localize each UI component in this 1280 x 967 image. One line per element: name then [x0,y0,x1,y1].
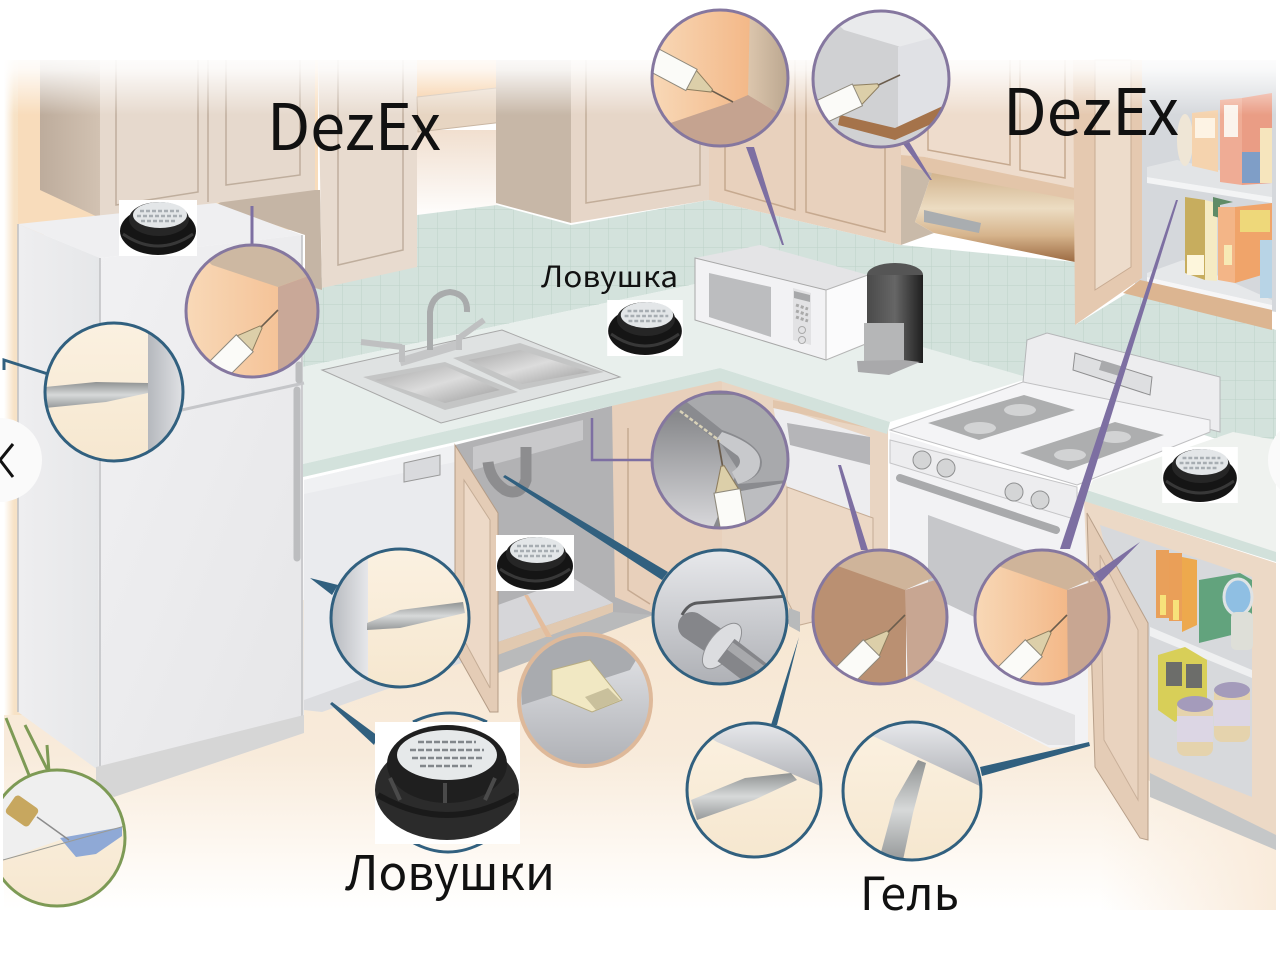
zoom circle: pipe seal [650,549,790,690]
countertop [303,283,1030,477]
large trap [375,713,520,852]
range hood [901,165,1075,262]
trap on counter [607,300,683,356]
zoom circle: sink underside [650,390,790,530]
back wall [4,60,497,715]
top fade [0,50,1280,115]
zoom circle: upper cabinet inside corner [650,8,790,148]
microwave [695,245,868,360]
zoom circle: green applicator [3,768,126,908]
upper cabinets [40,60,1075,290]
open sink cabinet door [455,445,498,712]
sink and faucet [322,292,620,423]
open cabinet with shelves and books [1073,60,1276,330]
zoom circle: peach cabinet corner [974,548,1110,686]
zoom circle: fridge gel gap [45,320,188,465]
zoom circle: toe-kick gel line [842,722,984,862]
left navigation button [0,418,42,502]
fridge [18,203,304,797]
right counter [1083,432,1276,562]
right navigation button [1268,418,1280,502]
trap in sink cabinet [496,535,574,591]
trap on fridge [119,200,197,256]
zoom circle: dishwasher gel gap [330,548,470,690]
stove [890,333,1220,748]
coffee maker [857,263,923,375]
zoom circle: brown cabinet corner [812,548,948,686]
label: DezEx right: DezEx [1003,62,1179,154]
zoom circle: bait station [518,632,653,768]
label: DezEx left: DezEx [267,77,441,169]
trap on right counter [1162,447,1238,503]
lower right cabinet with groceries [1084,501,1276,850]
zoom circle: fridge top corner [184,244,320,378]
green tile backsplash [303,200,1276,445]
label: gel: Гель [860,858,959,924]
label: trap small: Ловушка [541,254,678,296]
zoom circle: floor gel line [685,722,825,858]
dishwasher [304,445,470,712]
label: traps: Ловушки [345,834,555,904]
zoom circle: cabinet underside [812,10,950,148]
leader lines [4,140,1178,776]
base cabinets under sink [455,378,888,673]
floor [4,600,1276,910]
